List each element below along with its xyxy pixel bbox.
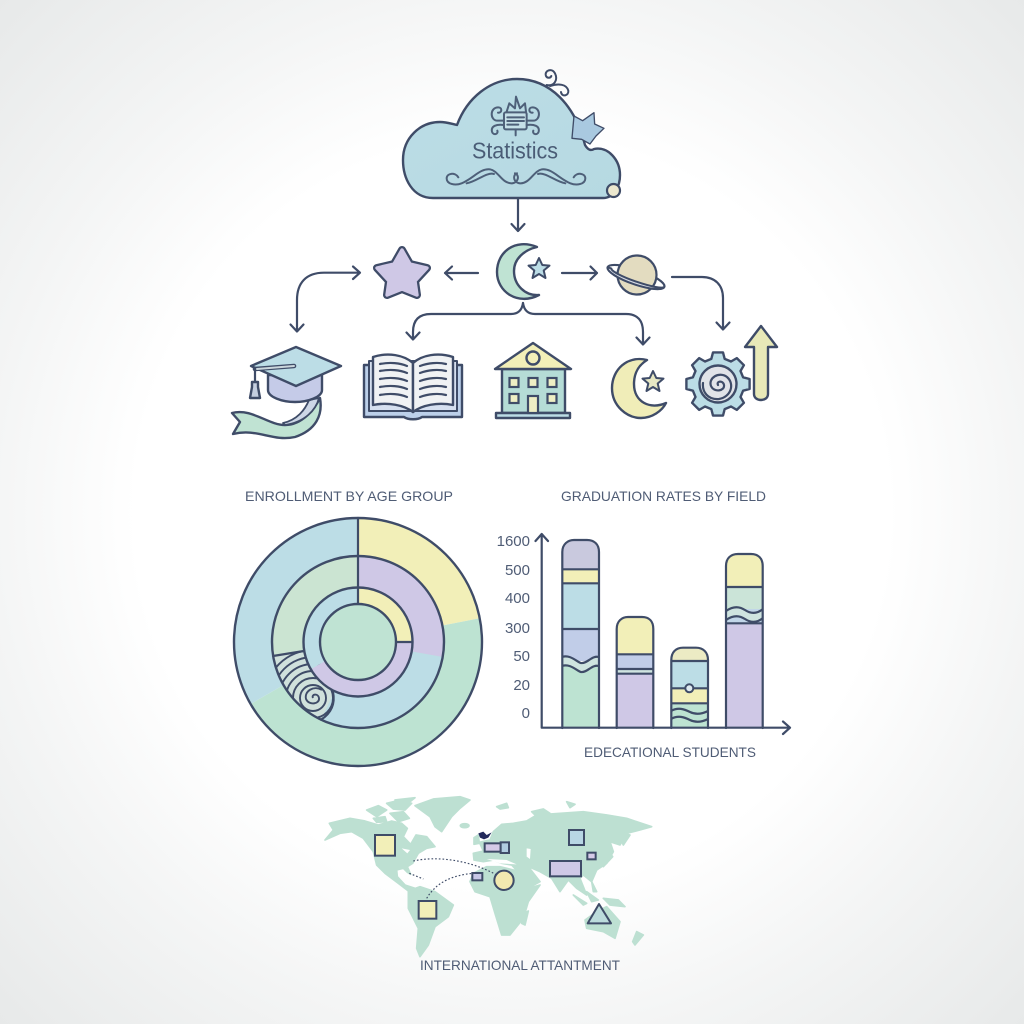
arrow: moon branch to book xyxy=(406,303,523,340)
icon: school building xyxy=(495,343,571,418)
map markers xyxy=(375,830,611,923)
middle ring xyxy=(265,556,444,746)
swirl pattern xyxy=(276,652,332,718)
arrow: star to graduation cap xyxy=(290,266,360,332)
icon: upward arrow xyxy=(745,326,777,400)
arrow: moon branch to yellow moon xyxy=(523,303,650,344)
cloud ornament: document and crown xyxy=(492,97,539,135)
bar 3 xyxy=(671,647,709,728)
arrow: cloud to moon xyxy=(512,199,524,231)
icon: green moon and star xyxy=(497,244,550,299)
cap board xyxy=(251,347,341,386)
x axis label: EDECATIONAL STUDENTS xyxy=(584,744,756,760)
cloud: statistics xyxy=(403,70,620,198)
icon: open book xyxy=(364,355,462,419)
inner ring xyxy=(304,588,412,696)
core circle xyxy=(320,604,396,680)
donut chart: enrollment by age group xyxy=(234,518,482,766)
icon: ringed planet xyxy=(605,256,667,294)
icon: graduation cap xyxy=(232,347,341,438)
outer ring xyxy=(234,518,482,766)
cloud shape xyxy=(403,79,620,198)
route lines xyxy=(409,859,497,898)
arrow: moon to star xyxy=(445,266,478,280)
cloud curl ornament xyxy=(546,70,568,95)
map caption: INTERNATIONAL ATTANTMENT xyxy=(420,957,620,973)
tassel xyxy=(250,366,294,398)
bar 1 xyxy=(562,540,599,728)
continents xyxy=(325,797,652,957)
y axis labels: 1600 xyxy=(497,533,530,550)
marker: dark Europe blob xyxy=(478,832,492,839)
y axis labels xyxy=(497,533,530,722)
y axis labels: 50 xyxy=(513,648,530,665)
y axis labels: 500 xyxy=(505,562,530,579)
y axis labels: 400 xyxy=(505,590,530,607)
bar 2 xyxy=(616,617,654,729)
heading: graduation: GRADUATION RATES BY FIELD xyxy=(561,488,766,504)
cap base xyxy=(268,375,322,402)
arrow: planet to gear xyxy=(672,277,730,330)
white gaps: inland seas xyxy=(402,848,531,864)
y axis labels: 20 xyxy=(513,677,530,694)
bar chart: graduation rates xyxy=(497,533,790,760)
bar 4 xyxy=(726,554,763,728)
arrow: moon to planet xyxy=(562,266,597,280)
y axis labels: 300 xyxy=(505,620,530,637)
y axis labels: 0 xyxy=(522,705,530,722)
cloud knob xyxy=(607,184,620,197)
ribbon xyxy=(232,398,321,438)
icon: gear with spiral xyxy=(686,352,750,416)
chart axes xyxy=(536,534,790,734)
icon: purple star xyxy=(377,250,427,295)
icon: yellow moon and star xyxy=(612,359,666,418)
cloud flourish xyxy=(447,169,585,184)
world map xyxy=(325,797,652,957)
cloud title: Statistics xyxy=(472,137,558,163)
heading: enrollment: ENROLLMENT BY AGE GROUP xyxy=(245,488,453,504)
maple leaf xyxy=(572,113,604,144)
